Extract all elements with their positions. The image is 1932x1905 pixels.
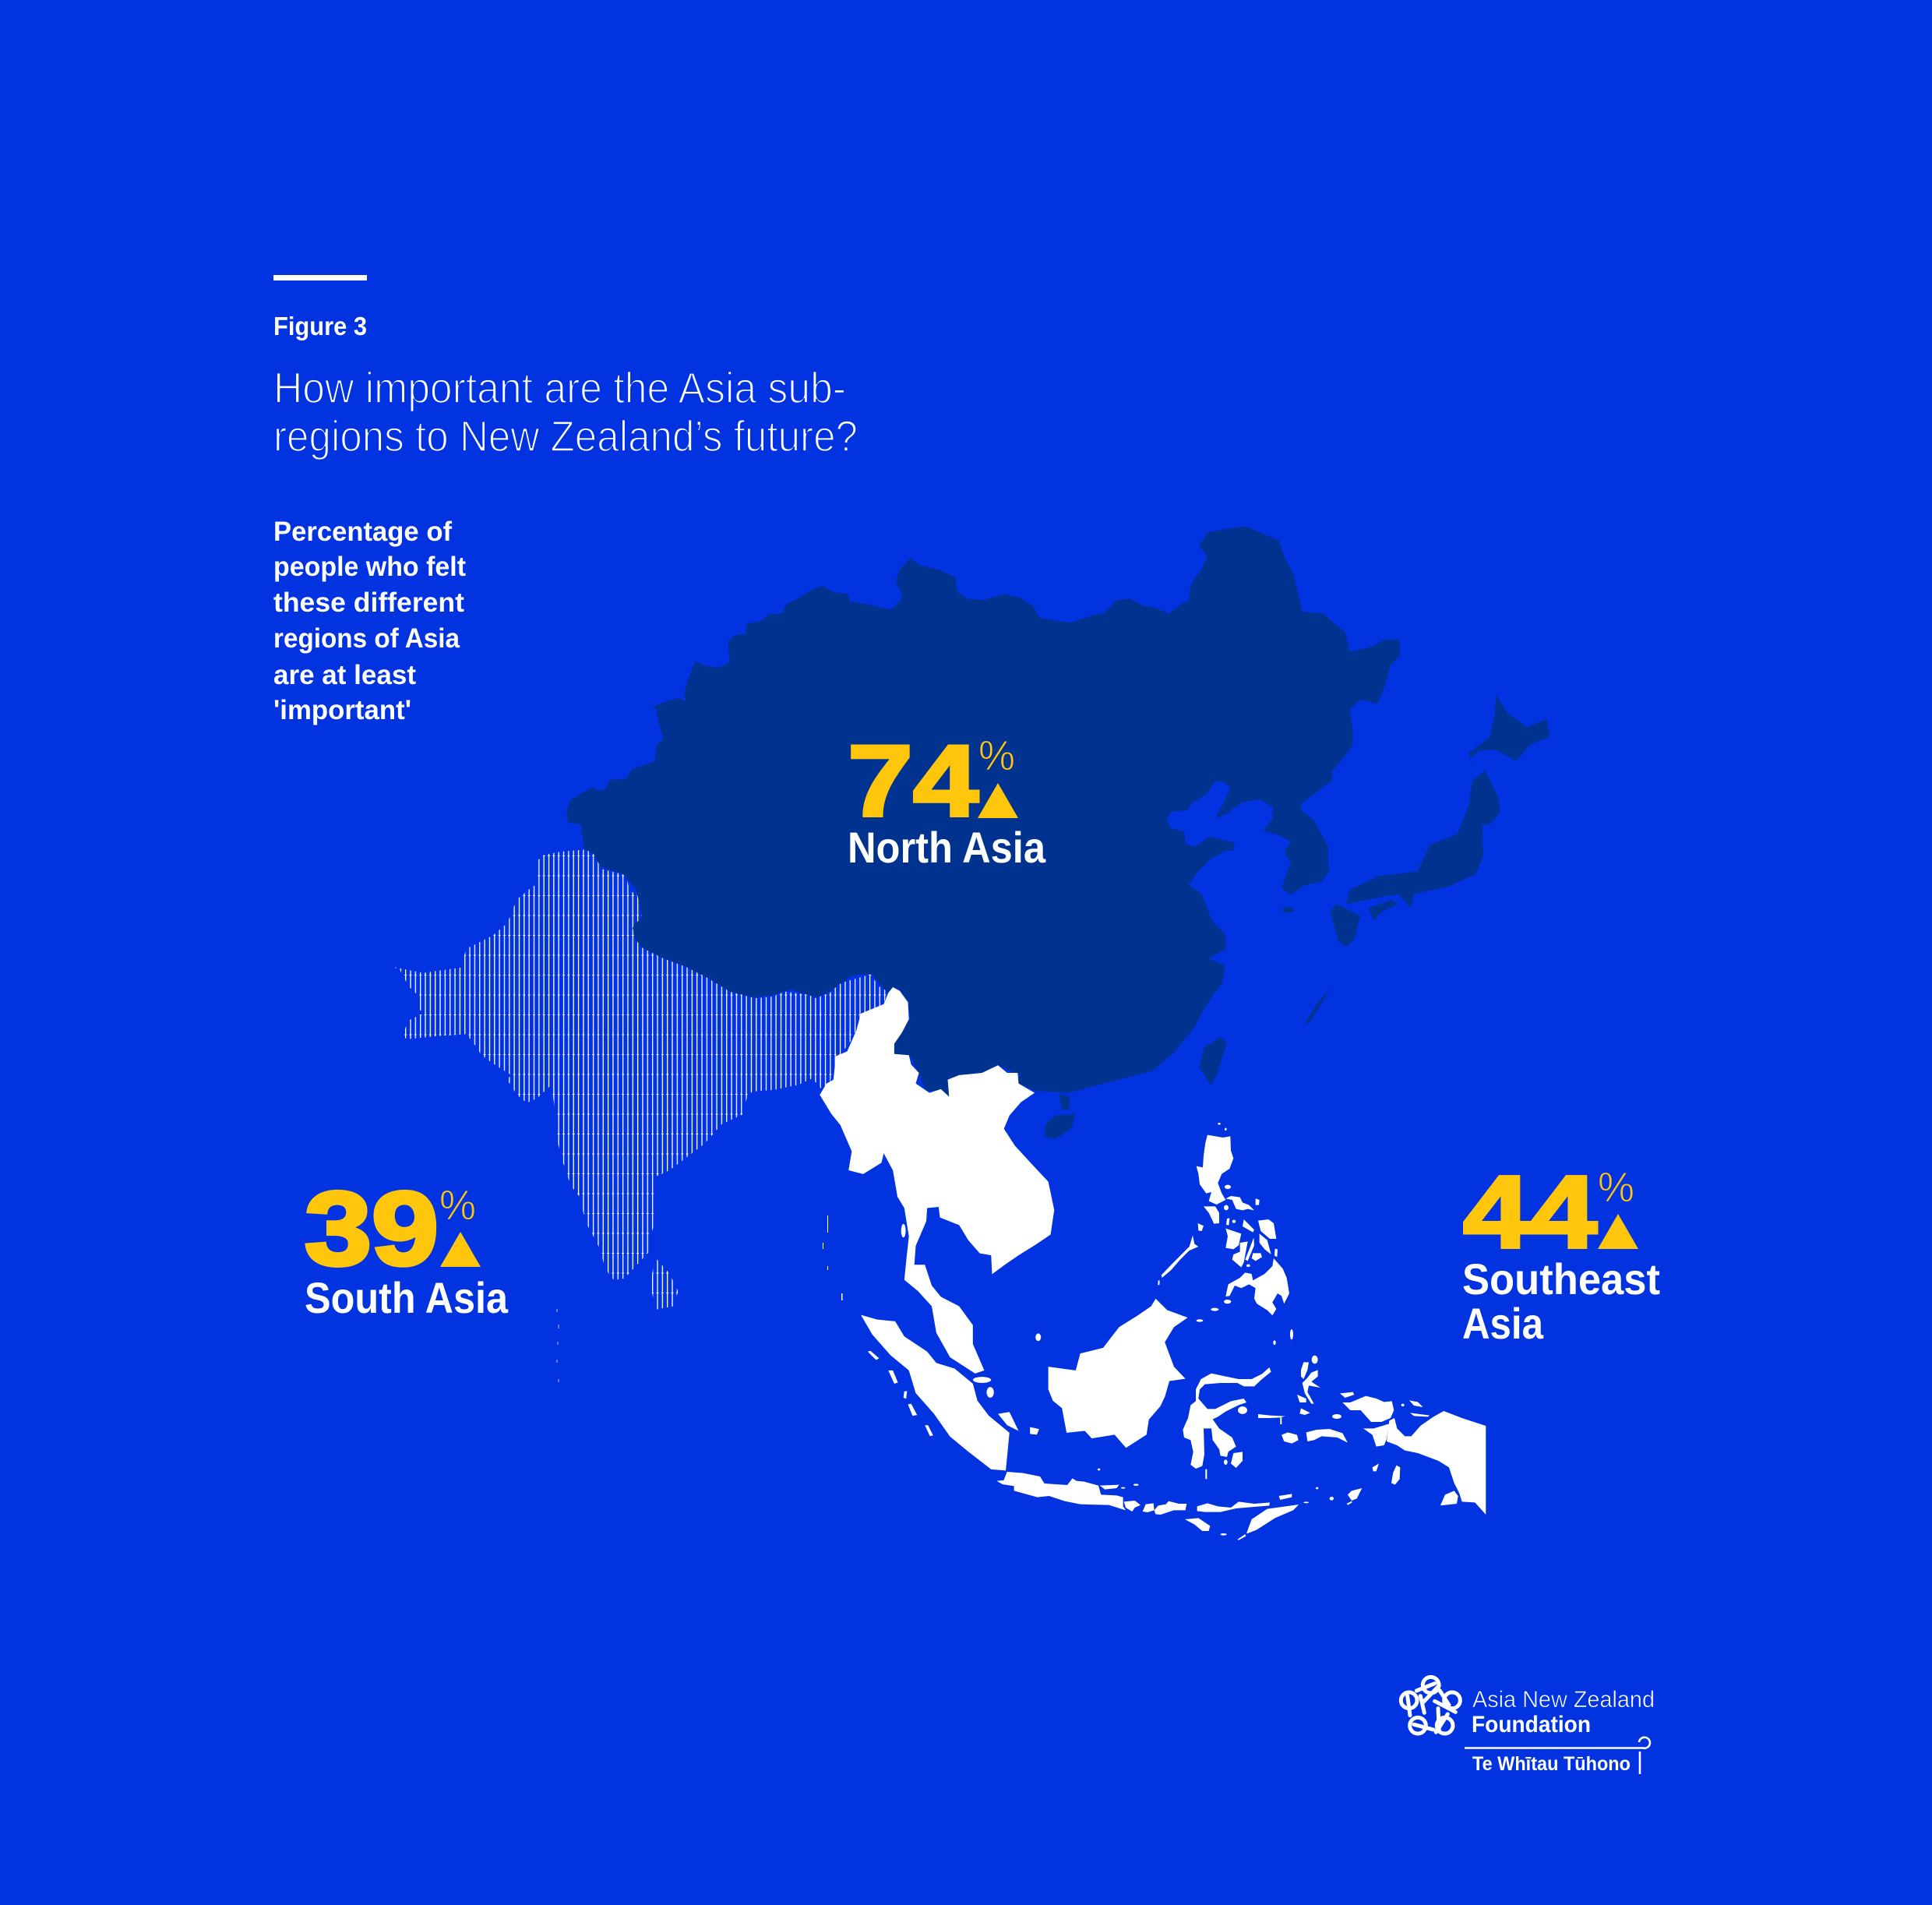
value 44: 44: [1463, 1155, 1597, 1269]
triangle marker: [440, 1232, 481, 1267]
Japan: Honshu: [1346, 771, 1500, 908]
map: Southeast Asia region: [820, 987, 1486, 1540]
region label: Asia: [1462, 1299, 1544, 1348]
logo: Asia New Zealand Foundation: [1401, 1677, 1655, 1775]
description text: 'important': [273, 695, 411, 725]
Borneo: [1049, 1299, 1188, 1448]
Taiwan: [1199, 1037, 1227, 1085]
Philippines: [1158, 1123, 1293, 1345]
value 39: 39: [305, 1171, 439, 1287]
value 74: 74: [848, 724, 978, 838]
region label: [1462, 1254, 1660, 1348]
Jeju: [1282, 907, 1294, 912]
Bangka and Belitung: [998, 1412, 1018, 1431]
percent sign: %: [1598, 1164, 1634, 1211]
Ryukyu islands: [1305, 988, 1330, 1023]
Maori name: Te Whītau Tūhono: [1472, 1753, 1631, 1775]
description text: regions of Asia: [273, 623, 460, 654]
Dolak island: [1440, 1490, 1458, 1505]
title: How important are the Asia sub-: [273, 363, 846, 412]
Java and Lesser Sunda islands: [996, 1469, 1309, 1540]
region label: South Asia: [305, 1273, 509, 1322]
description text: people who felt: [273, 552, 466, 582]
Biak and Yapen: [1409, 1400, 1423, 1407]
Aru islands: [1391, 1466, 1400, 1485]
New Guinea: [1387, 1411, 1486, 1515]
Bomberai: [1363, 1423, 1389, 1447]
title: regions to New Zealand’s future?: [273, 411, 858, 460]
stat: South Asia: [305, 1171, 509, 1322]
triangle marker: [978, 783, 1018, 818]
region label: Southeast: [1462, 1254, 1660, 1304]
Kai islands: [1373, 1463, 1379, 1471]
Natuna and Riau islands: [1035, 1333, 1041, 1341]
percent sign: %: [439, 1182, 476, 1229]
Japan: Shikoku: [1369, 900, 1398, 921]
map: North Asia region: [566, 527, 1549, 1097]
stat: Southeast Asia: [1462, 1155, 1660, 1348]
Halmahera: [1301, 1362, 1309, 1379]
Bird's Head: [1342, 1396, 1394, 1422]
header rule: [273, 275, 367, 280]
description text: these different: [273, 587, 464, 618]
Sula islands: [1258, 1414, 1285, 1418]
title: [273, 363, 858, 460]
figure label: Figure 3: [273, 312, 367, 340]
Japan: Hokkaido: [1469, 695, 1549, 771]
description text: are at least: [273, 660, 416, 690]
stat: North Asia: [848, 724, 1046, 872]
Buru: [1282, 1432, 1299, 1444]
Sulawesi: [1183, 1367, 1271, 1469]
organisation name: Asia New Zealand: [1472, 1687, 1655, 1713]
Obi and Bacan: [1299, 1408, 1310, 1415]
description text: [273, 517, 466, 725]
region label: North Asia: [848, 823, 1046, 872]
Japan: Kyushu: [1330, 904, 1360, 947]
map: Hainan and Leizhou: [1045, 1094, 1076, 1139]
organisation name bold: Foundation: [1472, 1712, 1591, 1737]
Sumatra: [861, 1315, 1010, 1470]
description text: Percentage of: [273, 517, 452, 547]
triangle marker: [1598, 1214, 1638, 1249]
mainland Southeast Asia: [820, 987, 1054, 1374]
Waigeo: [1340, 1392, 1354, 1398]
China, Mongolia and Korea landmass: [566, 527, 1400, 1097]
Tanimbar: [1348, 1488, 1362, 1501]
percent sign: %: [978, 732, 1015, 779]
Buton: [1231, 1452, 1243, 1468]
western Southeast Asia: [820, 987, 1188, 1470]
Seram: [1306, 1429, 1348, 1443]
eastern Indonesia: [1183, 1356, 1486, 1515]
Mentawai and Nias islands: [868, 1351, 880, 1360]
map: South Asia striped region: [374, 826, 919, 1382]
icon: knot emblem: [1401, 1677, 1460, 1734]
logo rule with hook: [1465, 1737, 1650, 1774]
